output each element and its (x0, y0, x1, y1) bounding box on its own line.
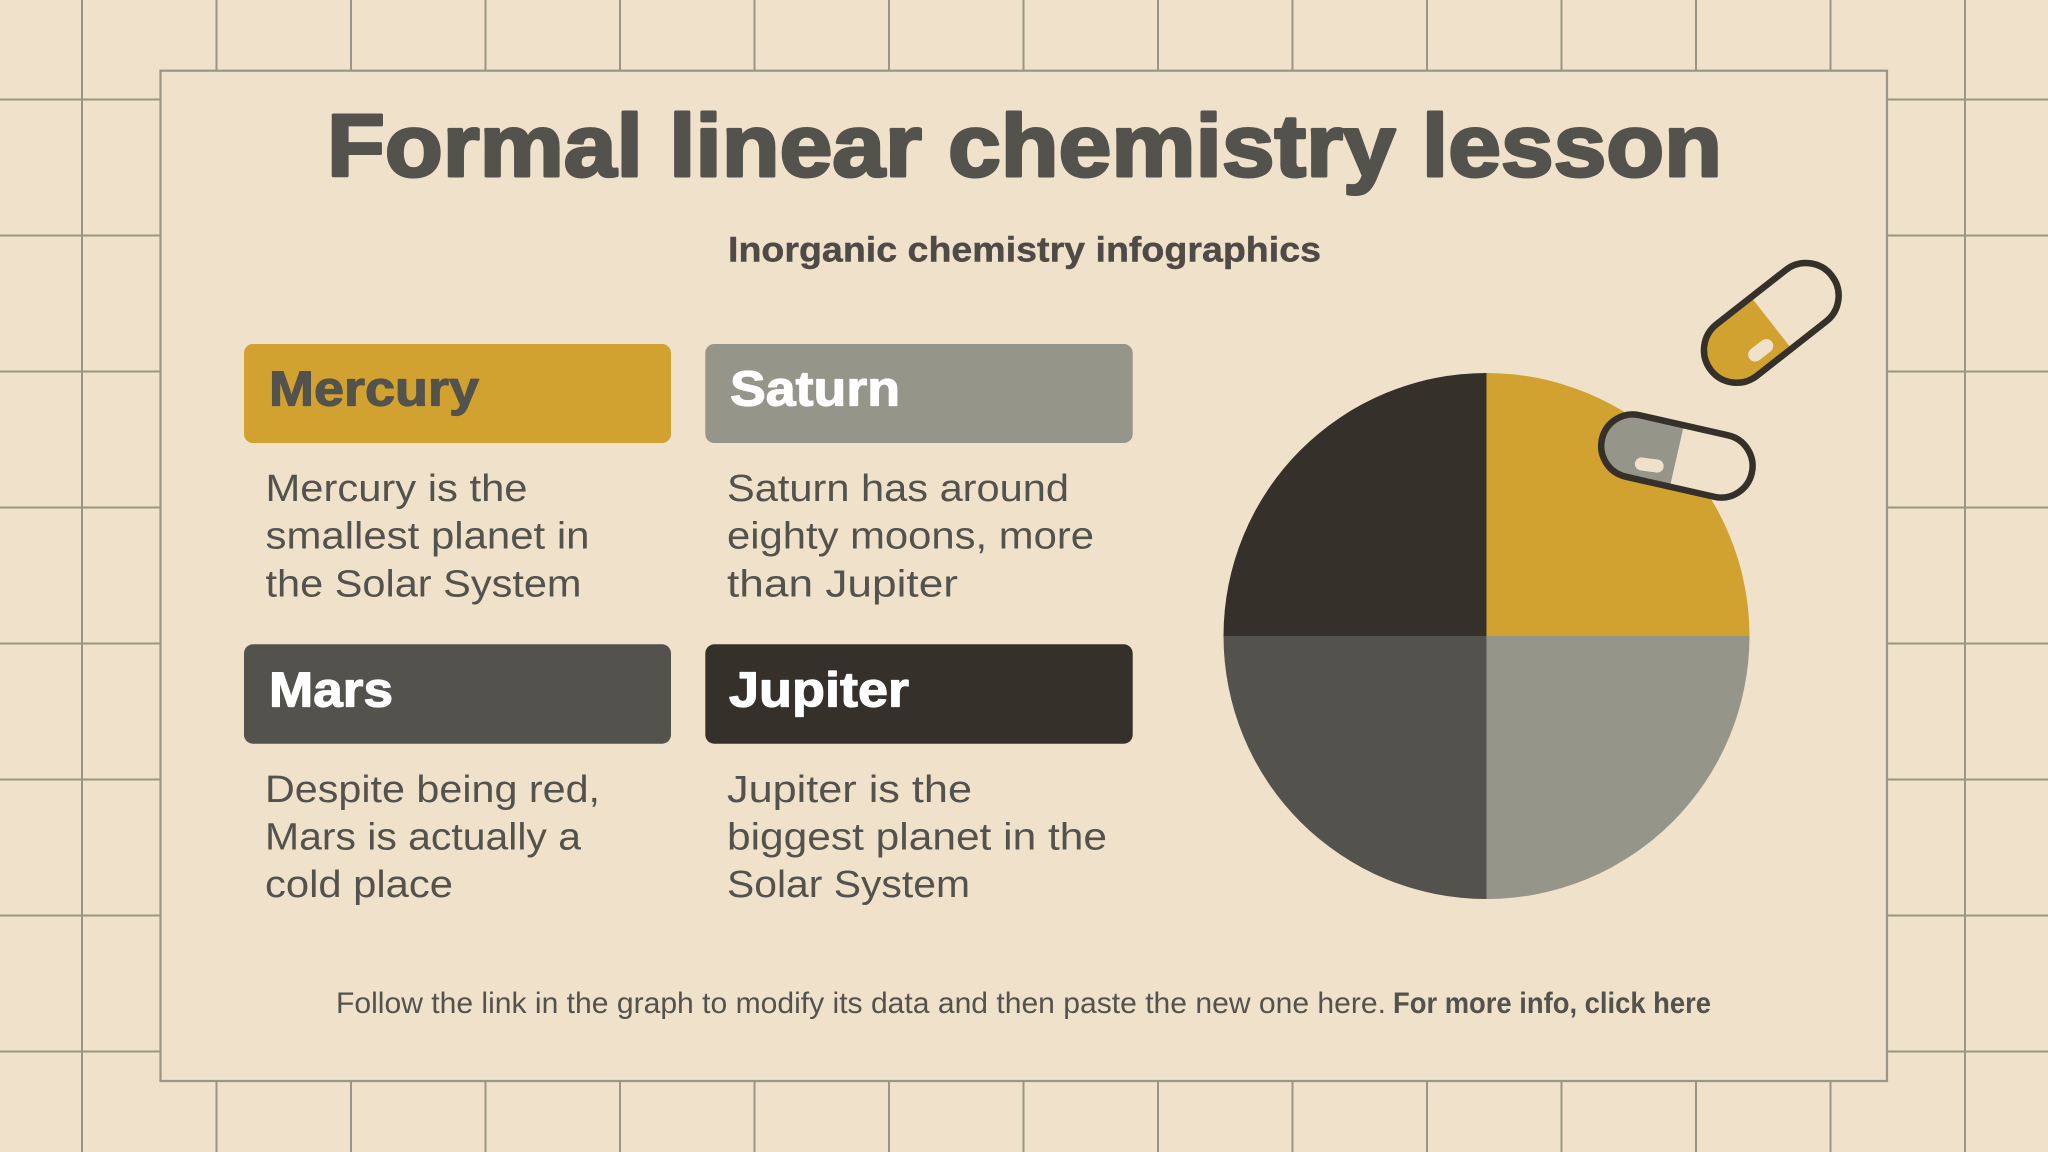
subtitle: Inorganic chemistry infographics (728, 230, 1321, 270)
Mercury description (266, 468, 590, 605)
capsule highlight (1634, 457, 1665, 473)
footer note: Follow the link in the graph to modify its data and then paste the new one here. (336, 987, 1386, 1020)
Saturn description: Saturn has around (727, 468, 1069, 510)
Jupiter description: Solar System (727, 864, 970, 906)
Mercury header bar (244, 344, 671, 443)
footer note: For more info, click here (1393, 987, 1711, 1020)
Mercury heading: Mercury (269, 362, 479, 416)
Mercury description: Mercury is the (266, 468, 528, 510)
Mars description: Mars is actually a (265, 816, 582, 858)
pie chart (1224, 373, 1750, 899)
Jupiter description: Jupiter is the (727, 769, 972, 811)
Saturn description: eighty moons, more (727, 516, 1094, 558)
panel: Mars (244, 644, 671, 906)
Jupiter description (727, 769, 1107, 906)
panel: Jupiter (705, 644, 1133, 906)
Mars description: cold place (265, 864, 453, 906)
Jupiter heading: Jupiter (729, 664, 909, 718)
Saturn description: than Jupiter (727, 563, 958, 605)
icon: yellow capsule (1691, 250, 1852, 396)
Mars description (265, 769, 600, 906)
Jupiter description: biggest planet in the (727, 816, 1107, 858)
title: Formal linear chemistry lesson (327, 96, 1722, 195)
icon: grey capsule (1595, 408, 1759, 504)
Mercury description: smallest planet in (266, 516, 590, 558)
Saturn heading: Saturn (730, 362, 900, 416)
capsule highlight (1745, 336, 1776, 364)
panel: Mercury (244, 344, 671, 605)
Mars description: Despite being red, (265, 769, 600, 811)
Mars header bar (244, 644, 671, 744)
panel: Saturn (705, 344, 1133, 605)
panel: main card (160, 71, 1887, 1081)
Saturn header bar (705, 344, 1133, 443)
Mercury description: the Solar System (266, 563, 582, 605)
Mars heading: Mars (269, 664, 393, 718)
Saturn description (727, 468, 1094, 605)
Jupiter header bar (705, 644, 1133, 744)
